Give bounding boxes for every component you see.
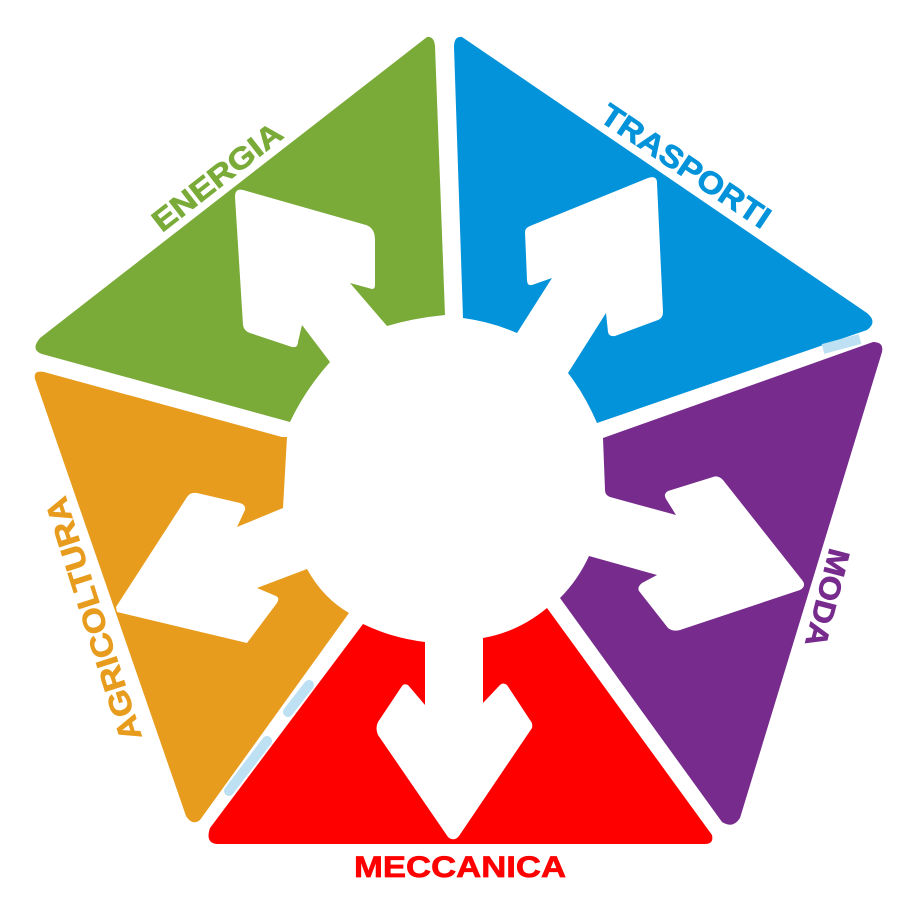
label: agricoltura: AGRICOLTURA [39, 493, 149, 745]
light blue fringe [823, 339, 860, 349]
panel: energia [35, 37, 445, 422]
purple segment with arrow cut-out [560, 342, 882, 825]
panel: trasporti [454, 37, 872, 423]
label: moda: MODA [798, 545, 855, 650]
label: energia: ENERGIA [146, 116, 289, 239]
panel: moda [560, 342, 882, 825]
label: trasporti: TRASPORTI [594, 97, 777, 235]
label: meccanica: MECCANICA [354, 851, 566, 884]
panel: meccanica [209, 608, 712, 884]
green segment with arrow cut-out [35, 37, 445, 422]
pale blue fringe [229, 685, 309, 791]
orange segment with arrow cut-out [35, 372, 349, 822]
red segment with arrow cut-out [209, 608, 712, 844]
panel: agricoltura [35, 372, 349, 822]
blue segment with arrow cut-out [454, 37, 872, 423]
